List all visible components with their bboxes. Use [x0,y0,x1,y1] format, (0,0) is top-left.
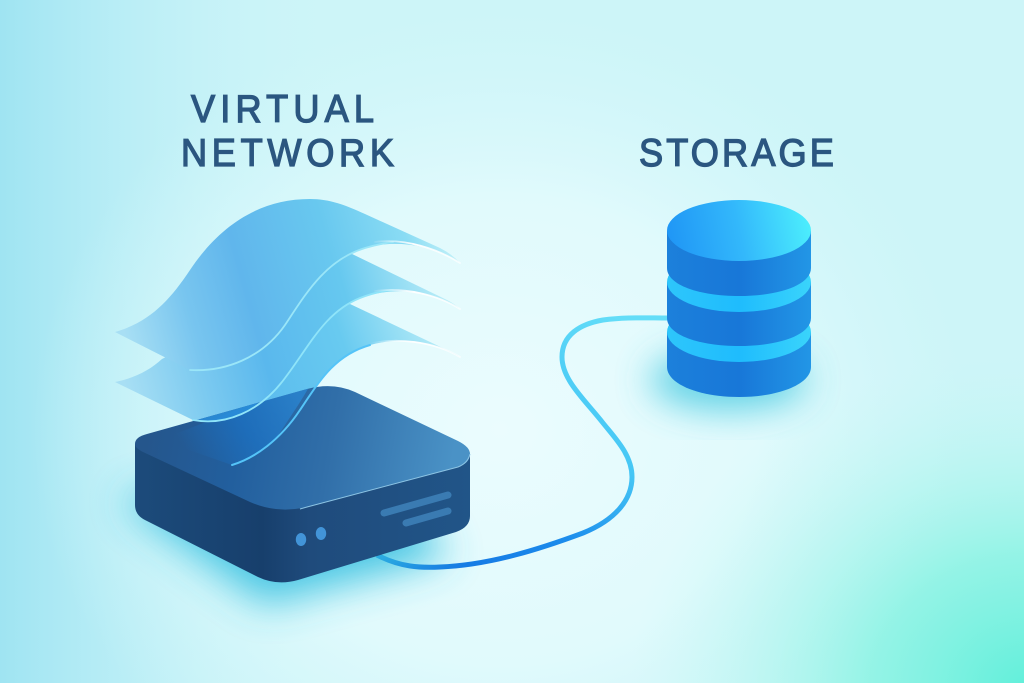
shadow: storage [650,350,806,410]
router top [135,386,470,510]
cylinder lid [667,200,811,261]
band: lower [667,302,811,362]
wave highlights [190,241,460,465]
tier: top [667,231,811,296]
sheet: third [200,304,460,440]
tier: bottom [667,332,811,397]
wave sheets [115,199,460,440]
storage cylinder [667,200,811,397]
router side [135,437,470,582]
band: upper [667,252,811,312]
sheet: second [115,253,460,421]
tier: middle [667,282,811,346]
title: virtual network: VIRTUAL [191,87,374,130]
led dots [296,527,326,546]
title: virtual network: NETWORK [181,131,394,174]
shadow: router [120,480,450,605]
title: storage: STORAGE [639,131,834,174]
sheet: first [115,199,460,370]
vent slots [384,495,448,523]
title: virtual network [181,87,394,174]
wave tint on lid [190,389,308,464]
router box [135,385,470,582]
cable [377,318,668,567]
